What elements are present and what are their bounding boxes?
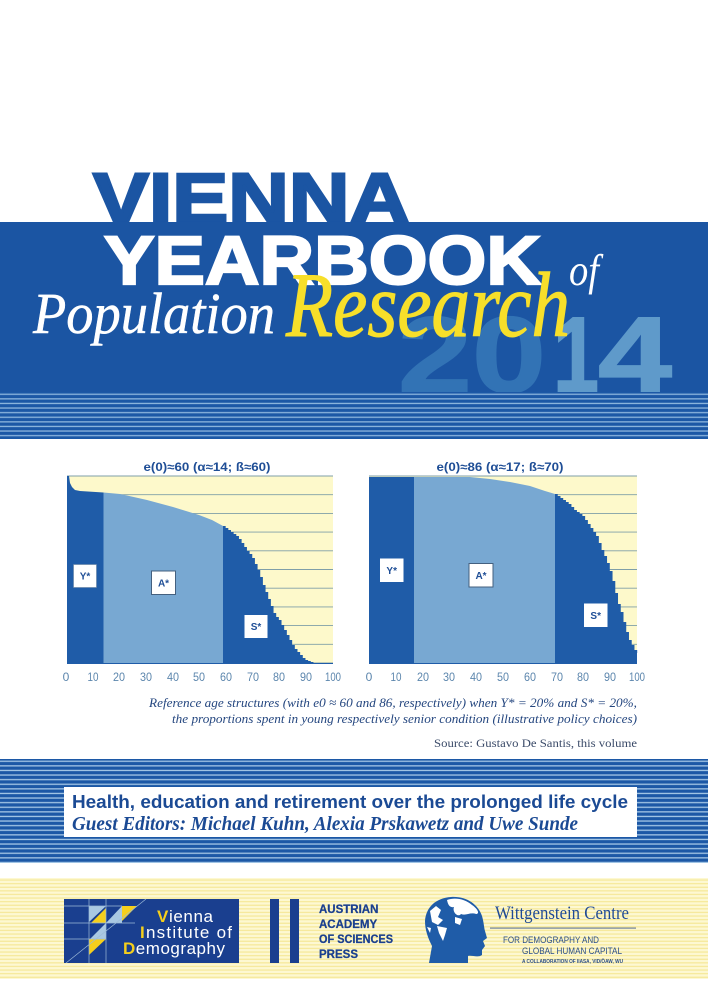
title word: YEARBOOK: YEARBOOK — [104, 222, 541, 299]
logo text: Wittgenstein Centre: FOR DEMOGRAPHY AND — [503, 935, 599, 946]
area: adult — [104, 492, 223, 663]
label: Y* — [380, 558, 404, 582]
title word: Population: Population — [32, 281, 275, 346]
x axis labels: 50 — [497, 670, 509, 684]
x axis labels: 70 — [247, 670, 259, 684]
label: S* — [584, 604, 608, 627]
guest editors: Guest Editors: Michael Kuhn, Alexia Prskawetz and Uwe Sunde — [72, 813, 578, 835]
label: S* — [244, 615, 268, 638]
grid lines — [369, 476, 637, 644]
chart: e(0)=86 — [366, 460, 645, 684]
area: young — [369, 477, 414, 663]
logo: Austrian Academy of Sciences Press: AUSTRIAN — [319, 904, 378, 916]
x axis labels: 90 — [300, 670, 312, 684]
x axis labels: 80 — [577, 670, 589, 684]
x axis labels: 20 — [113, 670, 125, 684]
label: Y*: Y* — [80, 572, 90, 582]
x axis labels: 30 — [443, 670, 455, 684]
x axis labels: 10 — [88, 670, 99, 684]
area: senior — [223, 526, 313, 663]
label: A*: A* — [158, 578, 169, 590]
label: A*: A* — [475, 571, 487, 582]
x axis labels: 0 — [366, 670, 373, 684]
axis line — [67, 662, 333, 664]
chart caption: the proportions spent in young respectively senior condition (illustrative policy choices) — [172, 711, 637, 726]
x axis labels: 40 — [470, 670, 482, 684]
plot background — [369, 476, 637, 663]
year: 2014: 4 — [598, 294, 672, 415]
logo: Austrian Academy of Sciences Press — [270, 899, 393, 963]
logo text: Wittgenstein Centre: A COLLABORATION OF IIASA, VID/ÖAW, WU — [522, 958, 623, 965]
title word: of: of — [569, 246, 604, 295]
chart title: e(0)≈60 (α≈14; ß≈60) — [144, 460, 270, 474]
chart caption — [148, 695, 637, 726]
x axis labels: 60 — [524, 670, 536, 684]
chart: e(0)=60 — [63, 460, 341, 684]
year: 2014: 20 — [398, 294, 546, 415]
x axis labels: 90 — [604, 670, 616, 684]
x axis labels: 40 — [167, 670, 179, 684]
x axis labels: 60 — [220, 670, 232, 684]
header stripes — [0, 392, 708, 439]
x axis labels: 80 — [273, 670, 285, 684]
logo: Austrian Academy of Sciences Press: ACADEMY — [319, 919, 377, 931]
x axis labels — [366, 670, 645, 684]
x axis labels: 20 — [417, 670, 429, 684]
logo text: Wittgenstein Centre: Wittgenstein Centre — [495, 904, 629, 924]
label: S*: S* — [251, 622, 261, 633]
title word: VIENNA: VIENNA — [93, 160, 410, 239]
area: young — [67, 476, 104, 663]
grid lines — [67, 476, 333, 663]
label: A* — [469, 564, 493, 587]
logo: Vienna Institute of Demography: Vienna — [157, 907, 214, 926]
plot background — [67, 476, 333, 663]
header band — [0, 222, 708, 393]
x axis labels: 30 — [140, 670, 152, 684]
year: 2014 — [398, 294, 672, 415]
issue title box — [64, 787, 637, 837]
x axis labels: 10 — [390, 670, 402, 684]
x axis labels: 0 — [63, 670, 70, 684]
logo text: Wittgenstein Centre: GLOBAL HUMAN CAPITAL — [522, 946, 622, 957]
axis line — [369, 662, 637, 664]
logo: Wittgenstein Centre head — [425, 897, 487, 963]
label: S*: S* — [590, 611, 601, 622]
source note: Source: Gustavo De Santis, this volume — [434, 738, 637, 750]
issue heading: Health, education and retirement over the prolonged life cycle — [72, 792, 628, 812]
year: 2014: 1 — [553, 294, 599, 415]
label: Y*: Y* — [386, 566, 397, 577]
x axis labels: 100 — [629, 670, 645, 684]
x axis labels: 70 — [551, 670, 563, 684]
logo: Austrian Academy of Sciences Press: OF SCIENCES — [319, 934, 393, 946]
chart caption: Reference age structures (with e0 ≈ 60 and 86, respectively) when Y* = 20% and S* = 20%, — [148, 695, 637, 710]
logo: Austrian Academy of Sciences Press: PRESS — [319, 949, 358, 961]
x axis labels: 100 — [325, 670, 341, 684]
logo: Vienna Institute of Demography: Demography — [123, 939, 226, 958]
x axis labels: 50 — [193, 670, 205, 684]
lower stripes band — [0, 759, 708, 863]
chart title: e(0)≈86 (α≈17; ß≈70) — [436, 460, 564, 474]
area: adult — [414, 477, 555, 663]
logo: Vienna Institute of Demography: Institute of — [140, 923, 232, 942]
title word: Research: Research — [285, 254, 570, 356]
label: A* — [152, 571, 176, 594]
area: senior — [555, 494, 637, 663]
logo text: Wittgenstein Centre — [490, 904, 636, 965]
footer band — [0, 878, 708, 979]
logo: Vienna Institute of Demography — [64, 899, 239, 963]
x axis labels — [63, 670, 341, 684]
label: Y* — [74, 564, 96, 588]
